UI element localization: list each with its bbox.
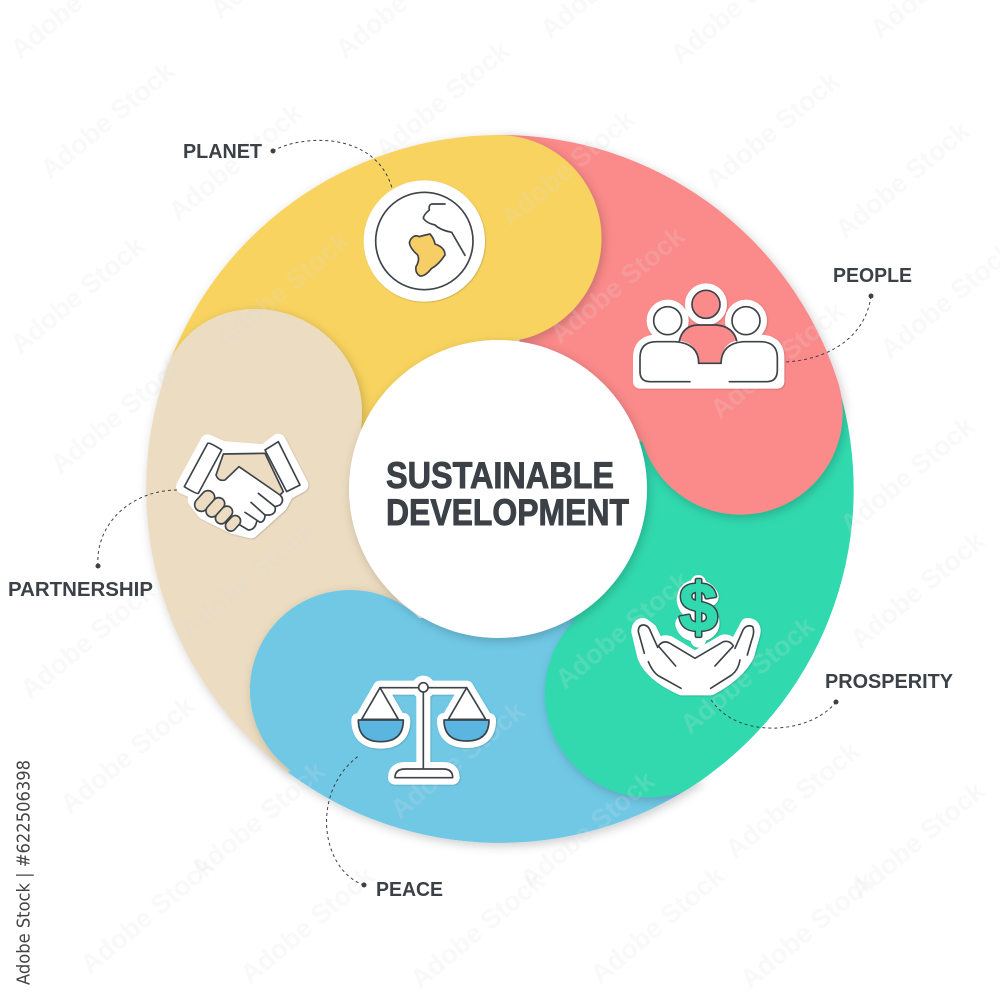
watermark: Adobe Stock (163, 97, 309, 227)
watermark: Adobe Stock (495, 103, 641, 233)
center circle (349, 340, 647, 638)
watermark: Adobe Stock (35, 55, 181, 185)
icon: prosperity hands and dollar: $ (679, 570, 717, 646)
stock id: Adobe Stock | #622506398 (14, 760, 34, 985)
label: peace (327, 755, 443, 901)
watermark: Adobe Stock (545, 220, 691, 350)
watermark: Adobe Stock (585, 860, 731, 990)
watermark: Adobe Stock (55, 690, 201, 820)
title (386, 455, 629, 533)
watermark: Adobe Stock (370, 35, 516, 165)
watermark: Adobe Stock (185, 755, 331, 885)
label: planet: PLANET (183, 141, 262, 163)
label: prosperity (710, 671, 954, 728)
watermark: Adobe Stock (845, 525, 991, 655)
label: partnership: PARTNERSHIP (8, 579, 153, 601)
icon: prosperity hands and dollar: $ (679, 570, 717, 646)
label: people: PEOPLE (833, 265, 912, 287)
watermark: Adobe Stock (550, 565, 696, 695)
segment: prosperity green head (542, 616, 710, 804)
watermark: Adobe Stock (705, 295, 851, 425)
watermark: Adobe Stock (175, 515, 321, 645)
watermark: Adobe Stock (405, 865, 551, 995)
watermark: Adobe Stock (700, 65, 846, 195)
watermark: Adobe Stock (515, 765, 661, 895)
segment: peace blue (250, 590, 700, 843)
watermark: Adobe Stock (735, 865, 881, 995)
watermark: Adobe Stock (15, 575, 161, 705)
title: SUSTAINABLE (386, 455, 614, 496)
icon: people (640, 290, 777, 382)
label: peace: PEACE (376, 879, 443, 901)
watermark: Adobe Stock (385, 695, 531, 825)
watermark: Adobe Stock (720, 735, 866, 865)
label: prosperity: PROSPERITY (825, 671, 954, 693)
watermark: Adobe Stock (235, 860, 381, 990)
icon: prosperity hands and dollar (638, 570, 754, 688)
segment: people red (500, 135, 843, 515)
icon: peace scales (358, 683, 489, 778)
label: partnership (8, 490, 178, 601)
watermark: Adobe Stock (75, 850, 221, 980)
watermark: Adobe Stock (675, 610, 821, 740)
icon: planet globe (364, 180, 485, 302)
watermark: Adobe Stock (210, 225, 356, 355)
watermark: Adobe Stock (835, 410, 981, 540)
segment: planet yellow (164, 135, 602, 430)
label: people (785, 265, 912, 362)
watermark: Adobe Stock (830, 115, 976, 245)
watermark: Adobe Stock (5, 230, 151, 360)
label: planet (183, 140, 392, 188)
segment: partnership beige (146, 309, 400, 773)
title: DEVELOPMENT (386, 492, 629, 533)
watermark: Adobe Stock (45, 350, 191, 480)
watermark: Adobe Stock (845, 775, 991, 905)
segment: prosperity green base (560, 385, 854, 781)
icon: partnership handshake (183, 441, 301, 533)
